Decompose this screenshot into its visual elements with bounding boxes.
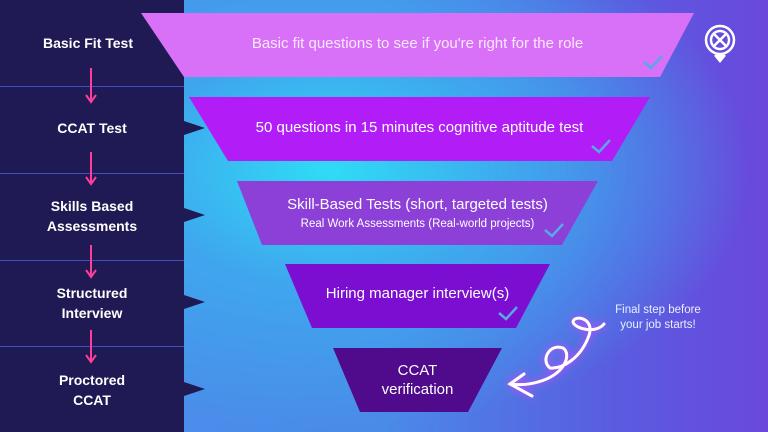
text: Skill-Based Tests (short, targeted tests) bbox=[287, 196, 548, 213]
stage label: Proctored CCAT bbox=[59, 372, 125, 408]
checkmarks bbox=[499, 56, 662, 319]
stage label: Proctored CCAT: CCAT bbox=[73, 392, 111, 408]
stage label: CCAT Test: CCAT Test bbox=[57, 120, 127, 136]
curly arrow bbox=[510, 318, 604, 396]
funnel stage shapes bbox=[141, 13, 694, 412]
callout bbox=[615, 304, 701, 331]
stage label: Basic Fit Test: Basic Fit Test bbox=[43, 35, 133, 51]
pink down arrows bbox=[86, 68, 96, 362]
funnel text: Basic fit questions to see if you're right for the role bbox=[252, 35, 583, 52]
pointer triangles bbox=[184, 121, 205, 396]
text: CCAT bbox=[398, 362, 437, 379]
stage label: Structured Interview: Interview bbox=[62, 305, 122, 321]
stage label: Skills Based Assessments bbox=[47, 198, 137, 234]
stage label: Skills Based Assessments: Skills Based bbox=[51, 198, 133, 214]
text: Real Work Assessments (Real-world projects) bbox=[301, 218, 534, 230]
left panel bbox=[0, 0, 184, 432]
stage label: Proctored CCAT: Proctored bbox=[59, 372, 125, 388]
stage label: Structured Interview: Structured bbox=[57, 285, 127, 301]
stage label: Skills Based Assessments: Assessments bbox=[47, 218, 137, 234]
stage label: Structured Interview bbox=[57, 285, 127, 321]
text: Hiring manager interview(s) bbox=[326, 285, 509, 302]
callout: your job starts! bbox=[620, 319, 696, 331]
text: 50 questions in 15 minutes cognitive aptitude test bbox=[256, 119, 583, 136]
text: verification bbox=[382, 381, 453, 398]
callout: Final step before bbox=[615, 304, 701, 316]
logo bbox=[706, 26, 734, 61]
